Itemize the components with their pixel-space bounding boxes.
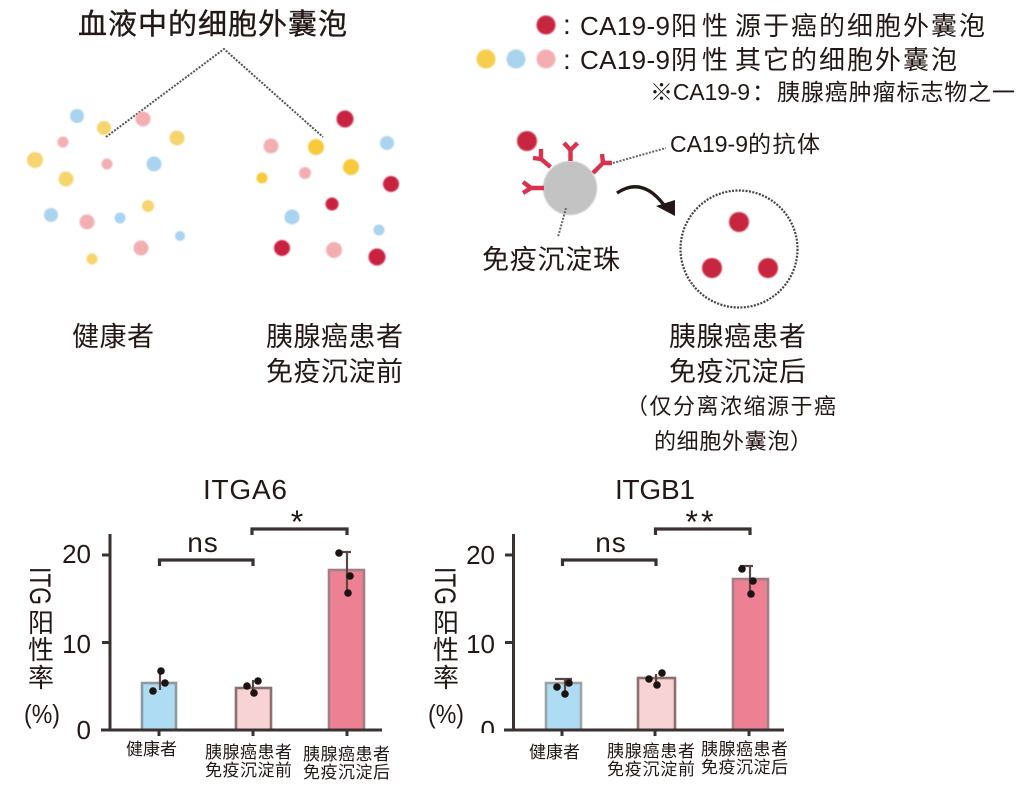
chart title: ITGA6	[203, 474, 287, 505]
icon: bound vesicle	[517, 131, 537, 151]
y axis label: (%)	[428, 699, 464, 729]
significance text	[595, 504, 716, 558]
legend: CA19-9 negative: 其它的细胞外囊泡	[735, 45, 957, 75]
label: patient before: 免疫沉淀前	[266, 357, 403, 387]
legend: CA19-9 negative	[476, 44, 957, 75]
y tick labels: 20	[62, 539, 91, 569]
antibody label: 的抗体	[748, 131, 820, 157]
bead label: 免疫沉淀珠	[482, 245, 620, 275]
note: isolates cancer vesicles	[626, 394, 836, 454]
y axis label: 阳	[433, 608, 459, 638]
legend: CA19-9 positive: 阳性	[671, 11, 728, 41]
significance brackets	[160, 529, 347, 566]
footnote: 胰腺癌肿瘤标志物之一	[777, 79, 1015, 105]
chart: ITGA6	[23, 474, 390, 782]
y axis label: 率	[433, 663, 459, 693]
label: patient after: 免疫沉淀后	[669, 357, 806, 387]
y axis label: ITG	[428, 567, 461, 605]
y tick labels: 0	[77, 715, 91, 745]
bead pointer line	[558, 208, 566, 237]
label: patient before: 胰腺癌患者	[266, 322, 403, 352]
panel: healthy vesicles	[27, 109, 185, 264]
x labels: 免疫沉淀后	[303, 763, 390, 782]
y axis label: 率	[28, 663, 54, 693]
label: patient after	[669, 322, 806, 387]
footnote: ※CA19-9	[650, 79, 750, 105]
arrow	[617, 187, 675, 216]
panel: patient vesicles before immunoprecipitation	[256, 110, 399, 266]
antibody label: CA19-9	[670, 131, 748, 157]
icon: immunoprecipitation bead with antibodies	[523, 143, 612, 215]
label: patient after: 胰腺癌患者	[669, 322, 806, 352]
antibody label	[670, 131, 820, 157]
label: patient before	[266, 322, 403, 387]
y axis label: 阳	[28, 608, 54, 638]
dotted connector lines	[106, 49, 323, 137]
panel: isolated cancer vesicles	[680, 190, 798, 308]
note: isolates cancer vesicles: 的细胞外囊泡）	[654, 429, 812, 454]
significance text: ns	[187, 527, 219, 558]
x labels: 健康者	[126, 740, 177, 759]
y tick labels	[467, 546, 494, 733]
x labels: 免疫沉淀后	[701, 758, 788, 777]
chart title: ITGB1	[615, 474, 695, 505]
y tick labels: 10	[62, 629, 91, 659]
bars	[546, 579, 768, 730]
label: healthy: 健康者	[72, 322, 154, 352]
y axis label: (%)	[24, 699, 60, 729]
legend: CA19-9 negative: CA19-9	[580, 45, 670, 75]
significance brackets	[562, 529, 750, 566]
x labels: 胰腺癌患者	[607, 742, 695, 761]
y tick labels: 20	[466, 540, 495, 570]
axes	[504, 534, 784, 736]
antibody pointer line	[613, 148, 666, 163]
x labels	[529, 740, 788, 779]
error bars and points	[149, 549, 354, 697]
y axis label: ITG	[23, 567, 56, 605]
y tick labels: 10	[466, 629, 495, 659]
y tick labels: 0	[481, 715, 495, 745]
legend: CA19-9 negative: :	[563, 44, 571, 75]
title: 血液中的细胞外囊泡	[78, 8, 347, 41]
error bars and points	[553, 565, 757, 698]
x labels: 胰腺癌患者	[701, 740, 788, 759]
legend: CA19-9 positive: 源于癌的细胞外囊泡	[735, 11, 985, 41]
bars	[142, 570, 364, 730]
legend: CA19-9 negative: 阴性	[671, 45, 728, 75]
y axis label	[23, 567, 60, 729]
significance text: **	[686, 504, 716, 540]
x labels	[126, 740, 390, 782]
y axis label	[428, 567, 464, 729]
footnote	[650, 79, 1015, 105]
x labels: 免疫沉淀前	[205, 761, 292, 780]
significance text	[187, 504, 303, 558]
x labels: 胰腺癌患者	[205, 743, 292, 762]
chart: ITGB1	[428, 474, 788, 779]
axes	[101, 534, 382, 736]
significance text: *	[291, 504, 303, 540]
legend: CA19-9 positive: CA19-9	[580, 11, 670, 41]
x labels: 免疫沉淀前	[607, 760, 695, 779]
legend: CA19-9 positive	[536, 9, 985, 41]
x labels: 健康者	[529, 743, 580, 762]
y axis label: 性	[28, 635, 54, 665]
footnote: ：	[752, 79, 775, 105]
legend: CA19-9 positive: :	[563, 9, 571, 40]
x labels: 胰腺癌患者	[303, 745, 390, 764]
y tick labels	[62, 539, 91, 745]
note: isolates cancer vesicles: （仅分离浓缩源于癌	[626, 394, 836, 419]
y axis label: 性	[433, 635, 459, 665]
significance text: ns	[595, 527, 627, 558]
